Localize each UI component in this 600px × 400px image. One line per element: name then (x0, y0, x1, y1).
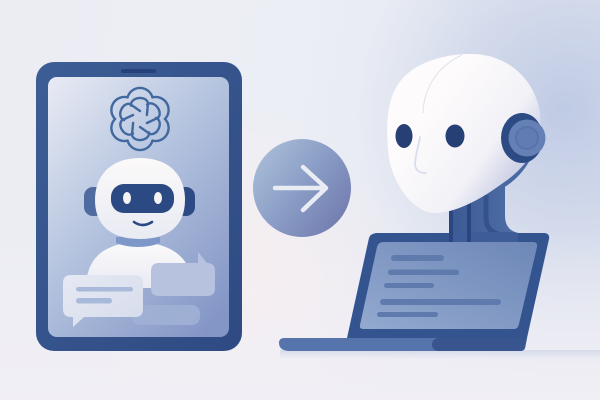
chat bubble: lower (132, 305, 200, 325)
tablet screen (48, 77, 229, 337)
robot body (86, 243, 190, 288)
laptop screen (360, 242, 537, 329)
earpiece (501, 113, 546, 163)
eyes (396, 124, 464, 148)
arrow circle (253, 139, 351, 237)
laptop (279, 232, 549, 351)
robot eyes (123, 192, 162, 204)
head wire (503, 160, 530, 188)
robot (84, 158, 195, 288)
laptop base dark section (432, 338, 527, 351)
robot neck (116, 237, 160, 247)
icon: arrow (275, 167, 326, 210)
head seam (423, 55, 462, 113)
bubble text lines (76, 287, 133, 304)
neck stripes over lid (449, 232, 518, 242)
tablet (36, 62, 242, 351)
tablet speaker (121, 69, 156, 73)
head (387, 54, 540, 213)
robot visor (111, 184, 174, 213)
code lines (377, 255, 501, 317)
chat bubble: left (63, 275, 143, 327)
icon: knot logo (107, 88, 173, 150)
robot ears (84, 187, 195, 216)
nose (415, 137, 426, 173)
robot smile (134, 222, 152, 225)
neck (449, 180, 518, 242)
laptop lid (347, 233, 549, 338)
tablet frame (36, 62, 242, 351)
chat bubble: right (151, 252, 215, 296)
laptop base (279, 338, 527, 351)
robot head (95, 158, 185, 239)
AI agent (279, 54, 549, 351)
